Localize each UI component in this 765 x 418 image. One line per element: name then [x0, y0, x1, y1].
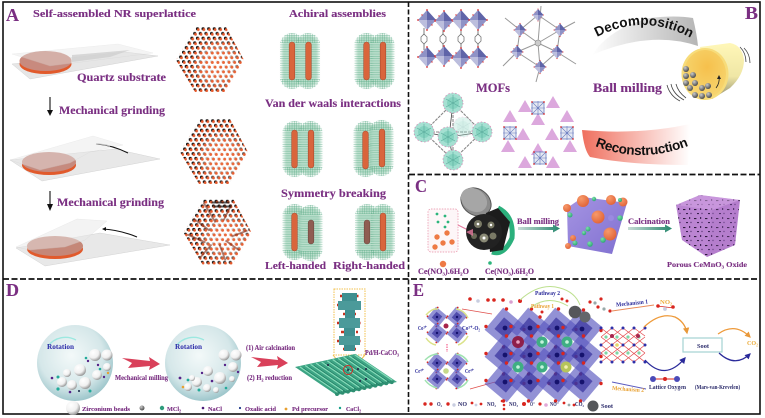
label: pathway 2: Pathway 2	[535, 291, 560, 297]
precursor box	[428, 209, 472, 252]
MOF structure 1	[417, 9, 488, 69]
MOF structure 2	[503, 6, 576, 82]
label: Ce4+ left: Ce⁴⁺	[415, 368, 424, 375]
label: NO2: NO₂	[660, 299, 672, 306]
lattice oxygen molecule	[650, 376, 680, 382]
legend row: Oxalic acid	[245, 406, 276, 413]
ribbon: decomposition: Decomposition	[594, 18, 692, 38]
legend row: Soot	[601, 404, 613, 410]
icon: ball mill cylinder	[667, 43, 750, 101]
panel C: porous oxide by ball milling	[415, 176, 748, 276]
label: CO2: CO₂	[747, 340, 758, 347]
label: van der waals interactions: Van der waals interactions	[265, 98, 402, 110]
panel A: grinding of nanorod superlattice	[6, 5, 405, 272]
ribbon: reconstruction	[582, 126, 688, 165]
perovskite lattice	[484, 307, 603, 403]
soot particles	[569, 306, 590, 322]
MOF structure 3	[414, 93, 492, 170]
panel letter A: A	[6, 5, 19, 25]
panel E: soot oxidation perovskite	[413, 280, 758, 412]
panel D: Pd/H-CaCO3 synthesis	[6, 280, 399, 415]
label: ball milling: Ball milling	[593, 80, 663, 95]
label: symmetry breaking: Symmetry breaking	[281, 188, 386, 200]
nanorod pair row 2 left	[282, 121, 322, 177]
label: Ce4+ right: Ce⁴⁺	[465, 368, 474, 375]
curved arrow: to CO2 orange	[718, 329, 750, 337]
arrow: down 2	[47, 191, 53, 211]
upper left cluster	[426, 307, 468, 345]
porous oxide cube	[676, 195, 740, 257]
hexagonal lattice 3	[184, 200, 252, 264]
legend: green particle	[488, 261, 492, 265]
legend row	[423, 400, 613, 412]
MOF structure 4	[501, 96, 577, 168]
label: mechanical milling: Mechanical milling	[115, 373, 168, 382]
panel letter C: C	[415, 176, 427, 196]
composite cube with particles	[563, 195, 628, 254]
label: Pd/H-CaCO3: Pd/H-CaCO₃	[365, 349, 399, 357]
label: H2 reduction: (2) H₂ reduction	[247, 374, 292, 382]
curved arrow: to soot blue	[645, 358, 685, 371]
label: pathway 1: Pathway 1	[531, 304, 554, 310]
legend row: CaCl₂	[346, 406, 361, 413]
legend row: NO⁻	[550, 402, 559, 408]
label: MOFs: MOFs	[476, 80, 510, 95]
legend row: NO₃	[509, 402, 518, 408]
upper to lower small link	[446, 344, 448, 352]
label: mechanical grinding 1: Mechanical grinding	[59, 105, 165, 117]
label: air calcination: (1) Air calcination	[246, 344, 295, 352]
hexagonal lattice 2	[180, 119, 248, 184]
arrow: calcination and reduction	[251, 356, 288, 369]
legend row: Pd precursor	[292, 406, 328, 413]
label: mechanism 2: Mechanism 2	[612, 386, 644, 394]
substrate illustration 3	[16, 219, 170, 266]
gas molecules above lattice	[468, 286, 612, 319]
label: mechanical grinding 2: Mechanical grinding	[57, 197, 164, 209]
legend row: CO₂	[575, 402, 584, 408]
ribbon: reconstruction: Reconstruction	[596, 138, 688, 156]
icon: milling jar	[455, 182, 512, 253]
lower left cluster	[425, 353, 468, 389]
curved arrow: to soot orange	[644, 316, 687, 333]
oxygen lattice diagram	[600, 326, 646, 364]
label: Co3+ -O2: Co³⁺-O₂	[462, 325, 480, 332]
label: calcination: Calcination	[628, 216, 670, 226]
label: ball milling: Ball milling	[517, 216, 560, 226]
legend row: O⁻	[530, 402, 535, 408]
legend row: NO	[458, 402, 467, 408]
substrate illustration 1	[12, 44, 158, 79]
legend: orange particle	[440, 261, 446, 267]
panel letter B: B	[745, 3, 758, 23]
arrow: mechanical milling	[122, 357, 160, 370]
nanorod pair right-handed	[355, 204, 395, 260]
nanorod pair row 1 right	[354, 33, 394, 89]
panel letter D: D	[6, 280, 19, 300]
legend row	[66, 401, 361, 415]
milling sphere 1	[37, 325, 113, 401]
hexagonal lattice 1	[176, 27, 244, 92]
curved arrow: to CO2 blue	[719, 353, 750, 361]
ribbon: decomposition	[594, 16, 698, 50]
label: porous oxide: Porous CeMnO₃ Oxide	[667, 260, 748, 269]
label: mechanism 1: Mechanism 1	[616, 299, 648, 309]
milling sphere 2: Rotation	[175, 342, 203, 351]
nanorod array catalyst	[300, 355, 392, 394]
legend row: Zirconium beads	[82, 406, 130, 413]
milling sphere 2	[165, 325, 242, 401]
label: left-handed: Left-handed	[265, 260, 326, 272]
magnified crystal stack	[333, 289, 365, 370]
link lines to lattice	[462, 309, 495, 389]
heading: achiral assemblies: Achiral assemblies	[289, 9, 386, 20]
arrow: calcination	[628, 224, 672, 232]
label: lattice oxygen: Lattice Oxygen	[649, 384, 686, 391]
line under mechanism 1	[612, 305, 654, 311]
panel B: MOFs by ball milling	[414, 3, 758, 170]
nanorod pair row 2 right	[354, 120, 394, 177]
label: Mars-van-Krevelen: (Mars-van-Krevelen)	[695, 384, 740, 391]
panel letter E: E	[413, 280, 424, 300]
legend row: O₂	[437, 402, 442, 408]
label: quartz substrate: Quartz substrate	[77, 72, 166, 84]
arrow: ball milling	[518, 224, 560, 232]
soot box	[683, 338, 722, 352]
nanorod pair left-handed	[282, 204, 322, 261]
label: Co3+: Co³⁺	[418, 325, 427, 332]
NO2 molecule	[656, 304, 675, 311]
nanorod pair row 1 left	[280, 33, 320, 89]
milling sphere 1: Rotation	[47, 342, 75, 351]
label: right-handed: Right-handed	[333, 260, 405, 272]
legend row: NaCl	[208, 406, 222, 413]
legend row: NO₂	[487, 402, 496, 408]
legend row: MCl₂	[167, 406, 181, 413]
soot box: Soot	[697, 343, 710, 350]
substrate illustration 2	[10, 136, 160, 181]
arrow: down 1	[47, 97, 53, 116]
line above mechanism 2	[612, 382, 646, 389]
legend: label cerium nitrate 2: Ce(NO₃).6H₂O	[485, 267, 534, 276]
heading: self-assembled superlattice: Self-assembled NR superlattice	[33, 9, 196, 20]
legend: label cerium nitrate 1: Ce(NO₃).6H₂O	[418, 267, 469, 276]
